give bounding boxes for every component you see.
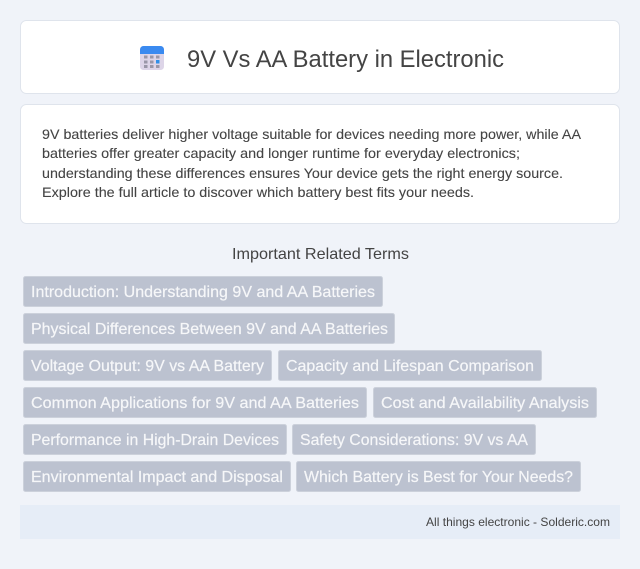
text: introduction paragraph: 9V batteries deliver higher voltage suitable for devices needing more power, while AA bbox=[42, 126, 582, 142]
tag: capacity and lifespan: Capacity and Lifespan Comparison bbox=[286, 358, 534, 375]
tag: cost and availability: Cost and Availability Analysis bbox=[381, 395, 589, 412]
text: introduction paragraph: understanding these differences ensures Your device gets the right energy source. bbox=[42, 165, 563, 181]
tag: cost and availability bbox=[374, 388, 596, 418]
footer: All things electronic - Solderic.com bbox=[426, 515, 610, 529]
tag group: related terms bbox=[24, 276, 596, 492]
tag: introduction bbox=[24, 276, 382, 306]
icon: calendar bbox=[140, 46, 164, 70]
tag: environmental impact: Environmental Impact and Disposal bbox=[31, 469, 283, 486]
tag: common applications bbox=[24, 388, 366, 418]
tag: common applications: Common Applications for 9V and AA Batteries bbox=[31, 395, 359, 412]
tag: physical differences: Physical Differences Between 9V and AA Batteries bbox=[31, 321, 388, 338]
panel: introduction bbox=[20, 104, 620, 224]
tag: environmental impact bbox=[24, 462, 290, 492]
tag: physical differences bbox=[24, 314, 394, 344]
tag: voltage output: Voltage Output: 9V vs AA Battery bbox=[31, 358, 264, 375]
tag: which battery bbox=[296, 462, 580, 492]
footer bbox=[20, 505, 620, 539]
text: introduction paragraph: batteries offer greater capacity and longer runtime for everyday electronics; bbox=[42, 145, 520, 161]
tag: capacity and lifespan bbox=[278, 350, 542, 380]
title: 9V Vs AA Battery in Electronic bbox=[187, 46, 504, 73]
text: introduction paragraph bbox=[42, 126, 582, 200]
tag: voltage output bbox=[24, 350, 272, 380]
tag: performance: Performance in High-Drain Devices bbox=[31, 432, 279, 449]
heading: important related terms: Important Related Terms bbox=[232, 246, 409, 263]
text: introduction paragraph: Explore the full article to discover which battery best fits your needs. bbox=[42, 184, 474, 200]
tag: performance bbox=[24, 424, 286, 454]
tag: introduction: Introduction: Understanding 9V and AA Batteries bbox=[31, 284, 375, 301]
panel: title header bbox=[20, 20, 620, 94]
tag: which battery: Which Battery is Best for Your Needs? bbox=[304, 469, 573, 486]
tag: safety bbox=[292, 424, 536, 454]
tag: safety: Safety Considerations: 9V vs AA bbox=[300, 432, 528, 449]
